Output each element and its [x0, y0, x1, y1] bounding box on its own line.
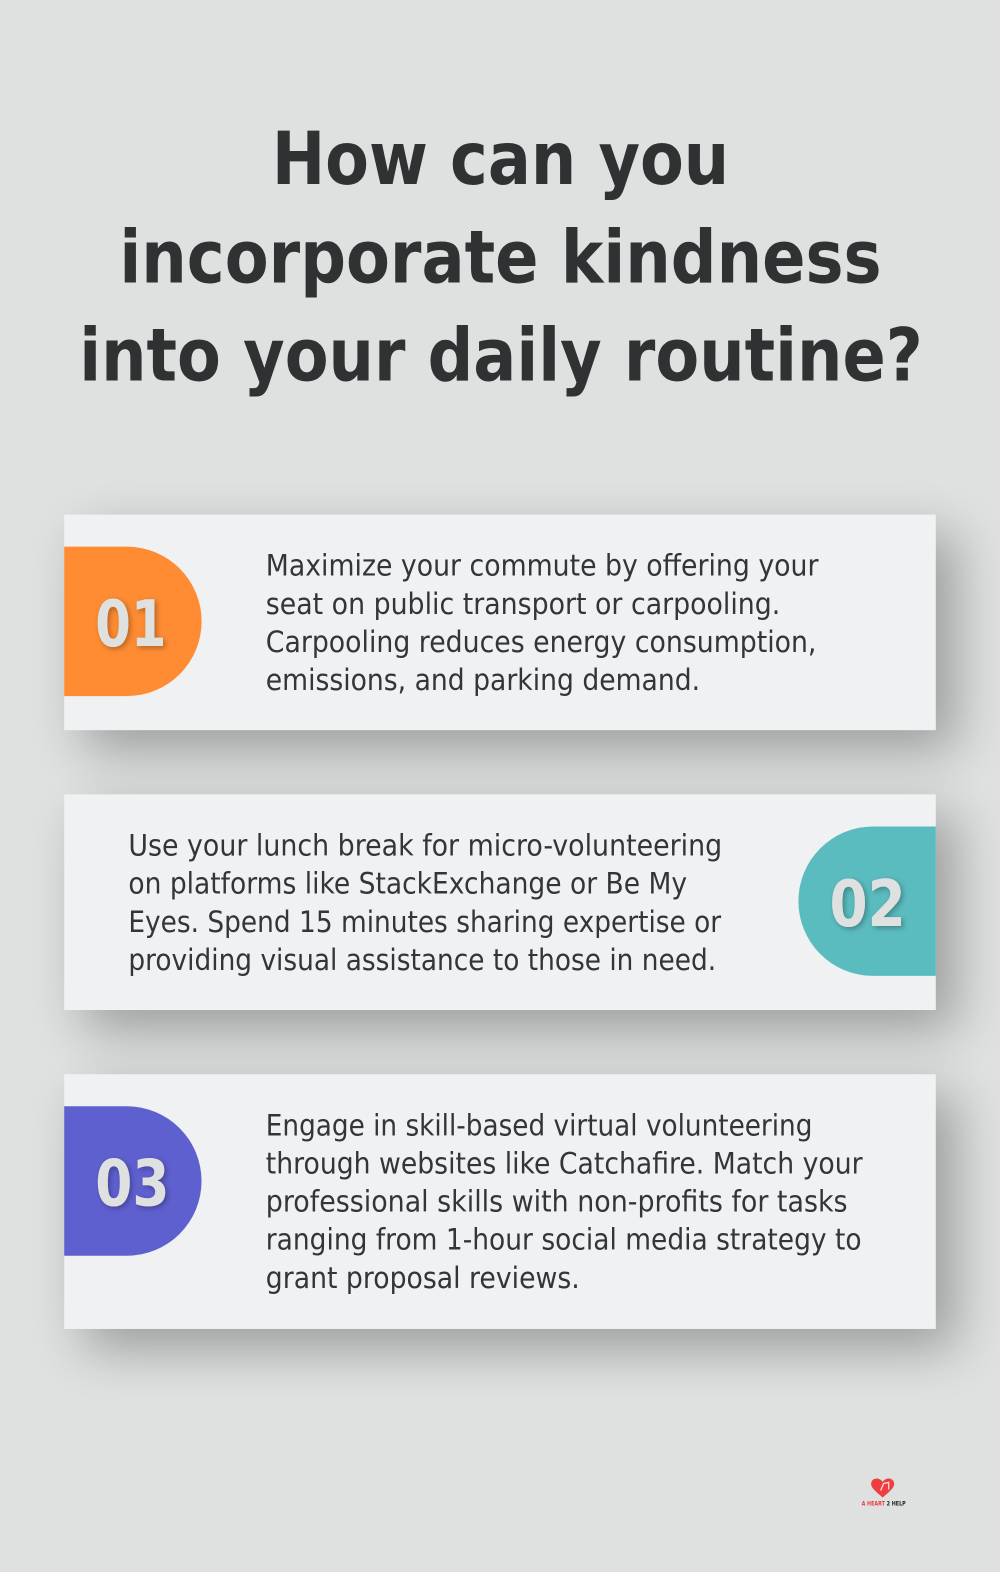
- text: step 02 description: Use your lunch break for micro-volunteering: [128, 829, 722, 863]
- badge: 02: 02: [829, 867, 906, 942]
- panel: step 02: [64, 794, 956, 1030]
- logo: A Heart 2 Help: [862, 1479, 906, 1508]
- text: step 01 description: [266, 549, 819, 697]
- title: [79, 117, 923, 399]
- text: step 02 description: [128, 829, 722, 977]
- badge: 03: [64, 1106, 202, 1256]
- text: step 02 description: Eyes. Spend 15 minutes sharing expertise or: [128, 905, 722, 939]
- panel: step 01: [64, 515, 956, 750]
- badge: 01: 01: [95, 587, 167, 662]
- text: step 03 description: through websites like Catchafire. Match your: [266, 1147, 863, 1181]
- title: incorporate kindness: [119, 215, 882, 300]
- text: step 01 description: Carpooling reduces energy consumption,: [266, 625, 816, 659]
- text: step 03 description: professional skills with non-profits for tasks: [266, 1185, 848, 1219]
- text: step 03 description: ranging from 1-hour social media strategy to: [266, 1223, 862, 1257]
- text: step 03 description: [266, 1108, 863, 1295]
- text: step 01 description: emissions, and parking demand.: [266, 663, 700, 697]
- title: How can you: [272, 117, 729, 202]
- text: step 03 description: Engage in skill-based virtual volunteering: [266, 1108, 812, 1142]
- panel: step 03: [64, 1074, 956, 1349]
- text: step 01 description: Maximize your commute by offering your: [266, 549, 819, 583]
- badge: 01: [64, 547, 202, 696]
- badge: 03: 03: [95, 1147, 170, 1222]
- text: step 01 description: seat on public transport or carpooling.: [266, 587, 780, 621]
- text: step 02 description: on platforms like StackExchange or Be My: [128, 867, 687, 901]
- text: step 03 description: grant proposal reviews.: [266, 1261, 580, 1295]
- logo: A Heart 2 Help: A HEART 2 HELP: [862, 1500, 906, 1508]
- text: step 02 description: providing visual assistance to those in need.: [128, 943, 716, 977]
- badge: 02: [798, 826, 936, 976]
